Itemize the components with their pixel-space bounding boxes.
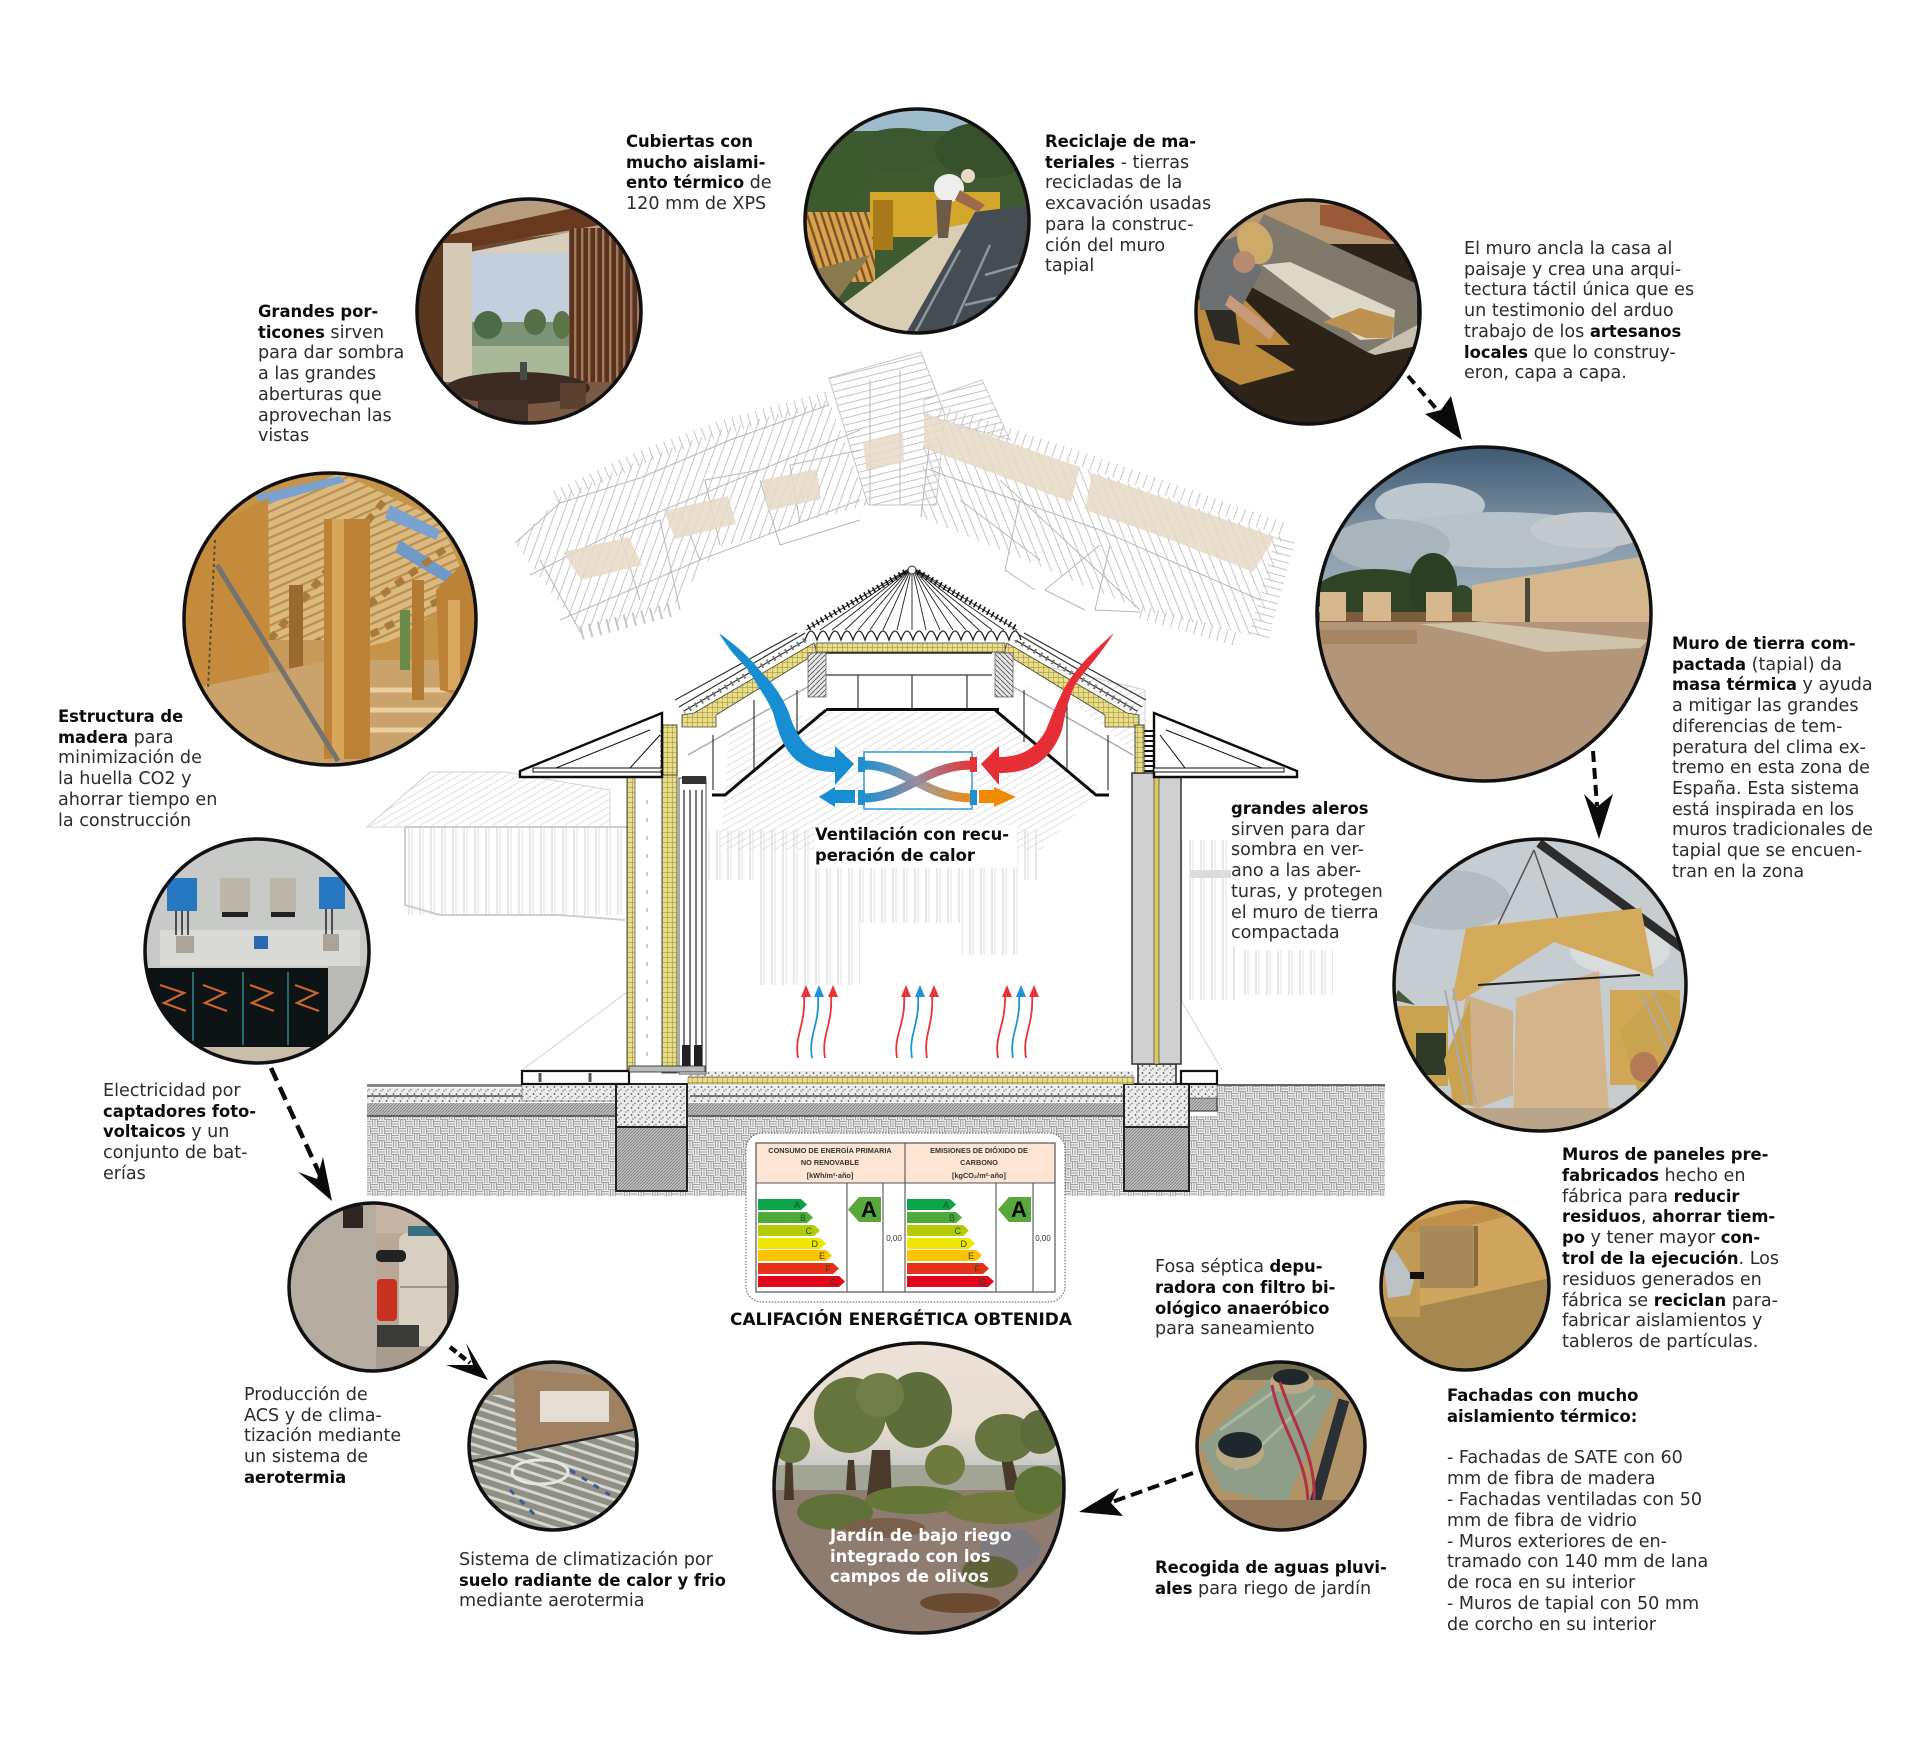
energy bars right: F — [974, 1264, 980, 1274]
text: cubiertas: mucho aislami- — [626, 153, 765, 172]
header right: CARBONO — [960, 1158, 998, 1167]
text: fachadas: tramado con 140 mm de lana — [1447, 1552, 1708, 1572]
text: fachadas: - Muros exteriores de en- — [1447, 1532, 1667, 1552]
text: fachadas: Fachadas con mucho — [1447, 1386, 1638, 1405]
values: 0,00 — [886, 1234, 902, 1243]
photo: roof insulation — [806, 110, 1028, 332]
text: produccion ACS: Producción de — [244, 1385, 368, 1405]
photo: aerothermal tank — [288, 1202, 459, 1372]
text: muro ancla — [1464, 239, 1694, 383]
text: reciclaje: para la construc- — [1045, 215, 1194, 235]
text: muros de paneles: trol de la ejecución. Los — [1562, 1249, 1779, 1269]
roof top insulation — [816, 643, 1005, 652]
rating A right — [998, 1197, 1031, 1222]
text: muros de paneles: tableros de partículas. — [1562, 1332, 1758, 1352]
ridge cone with fan lines — [805, 566, 1021, 640]
text: fachadas: de roca en su interior — [1447, 1573, 1635, 1593]
text: grandes aleros — [1231, 799, 1387, 946]
ghost background house — [367, 660, 1340, 1070]
energy bars right — [907, 1199, 994, 1287]
roof slope mirrored — [995, 633, 1146, 795]
text: muro ancla: trabajo de los artesanos — [1464, 322, 1681, 342]
energy bars left: F — [826, 1264, 832, 1274]
text: fosa septica: radora con filtro bi- — [1155, 1278, 1335, 1297]
ground layers — [367, 1084, 1385, 1196]
text: estructura: la construcción — [58, 811, 191, 831]
crossing ribbons — [864, 765, 972, 798]
text: muro ancla: locales que lo construy- — [1464, 343, 1676, 363]
text: sistema climatizacion — [459, 1550, 726, 1611]
photo: porticones window view — [417, 199, 641, 427]
building section drawing — [367, 566, 1385, 1196]
text: electricidad: Electricidad por — [103, 1081, 241, 1101]
text: muro de tierra — [1672, 634, 1873, 882]
text: grandes aleros: turas, y protegen — [1231, 882, 1383, 902]
text: porticones: para dar sombra — [258, 343, 404, 363]
text: produccion ACS — [244, 1385, 401, 1487]
text: electricidad: erías — [103, 1164, 146, 1184]
values: 0,00 — [1035, 1234, 1051, 1243]
text: fachadas: aislamiento térmico: — [1447, 1407, 1637, 1426]
text: muros de paneles: residuos, ahorrar tiem- — [1562, 1207, 1775, 1227]
blue intake arrow — [719, 633, 854, 785]
text: fachadas — [1447, 1386, 1708, 1635]
text: muro ancla: eron, capa a capa. — [1464, 363, 1627, 383]
energy bars left: B — [800, 1213, 806, 1223]
rating A left: A — [861, 1197, 877, 1222]
text: reciclaje: ción del muro — [1045, 236, 1165, 256]
text: sistema climatizacion: mediante aerotermia — [459, 1591, 645, 1611]
header left: NO RENOVABLE — [801, 1158, 859, 1167]
text: reciclaje — [1045, 132, 1211, 276]
photo: recycled earth bucket — [1195, 199, 1421, 425]
arrow: wall to panels — [1584, 751, 1613, 839]
header left: CONSUMO DE ENERGÍA PRIMARIA — [768, 1146, 892, 1155]
photo: timber structure — [184, 473, 476, 765]
photo: radiant floor — [468, 1361, 638, 1531]
right eave — [1135, 713, 1297, 777]
text: sistema climatizacion: Sistema de climatización por — [459, 1550, 713, 1570]
text: grandes aleros: sombra en ver- — [1231, 840, 1364, 860]
text: ventilacion: Ventilación con recu- — [815, 825, 1009, 844]
text: muro de tierra: está inspirada en los — [1672, 800, 1854, 820]
text: porticones: a las grandes — [258, 364, 376, 384]
text: fosa septica: para saneamiento — [1155, 1319, 1315, 1339]
text: produccion ACS: tización mediante — [244, 1426, 401, 1446]
text: recogida aguas — [1155, 1558, 1387, 1599]
text: grandes aleros: ano a las aber- — [1231, 861, 1361, 881]
text: porticones: aberturas que — [258, 385, 382, 405]
text: muro de tierra: tremo en esta zona de — [1672, 758, 1870, 778]
text: produccion ACS: ACS y de clima- — [244, 1406, 382, 1426]
text: jardin: Jardín de bajo riego — [830, 1526, 1011, 1545]
blue outlet arrow — [819, 787, 855, 807]
text: electricidad: voltaicos y un — [103, 1122, 229, 1142]
arrow: aerothermal to floor — [446, 1343, 488, 1380]
text: grandes aleros: compactada — [1231, 923, 1340, 943]
text: muro ancla: un testimonio del arduo — [1464, 301, 1674, 321]
text: porticones: vistas — [258, 426, 309, 446]
text: cubiertas: Cubiertas con — [626, 132, 753, 151]
circle outline wall — [1317, 447, 1651, 781]
circle outline olive — [774, 1343, 1064, 1633]
text: estructura: Estructura de — [58, 707, 183, 726]
roof slope and insulation — [675, 633, 826, 795]
energy bars right: G — [979, 1277, 986, 1287]
circle outline panel — [1381, 1202, 1549, 1370]
energy bars right: B — [949, 1213, 955, 1223]
circle outline solar — [145, 839, 369, 1063]
text: estructura: madera para — [58, 728, 173, 748]
left wall — [627, 743, 706, 1074]
circle outline porticones — [417, 199, 641, 423]
text: estructura — [58, 707, 217, 831]
floor slab — [522, 1064, 1217, 1084]
text: estructura: minimización de — [58, 748, 202, 768]
header right: [kgCO₂/m²·año] — [952, 1171, 1007, 1180]
circle outline tank — [1197, 1362, 1365, 1530]
text: muro ancla: El muro ancla la casa al — [1464, 239, 1672, 259]
orange outlet arrow — [979, 787, 1016, 807]
energy bars left: E — [819, 1251, 825, 1261]
text: ventilacion: peración de calor — [815, 846, 975, 865]
wireframe timber model — [515, 352, 1285, 640]
ceiling structure — [826, 653, 999, 711]
text: muros de paneles: fabricar aislamientos y — [1562, 1311, 1762, 1331]
photo: olive garden — [774, 1343, 1066, 1635]
text: muro ancla: paisaje y crea una arqui- — [1464, 260, 1681, 280]
text: muros de paneles: fábrica se reciclan para- — [1562, 1291, 1778, 1311]
text: electricidad: captadores foto- — [103, 1102, 256, 1121]
circle outline earth — [1196, 200, 1420, 424]
text: sistema climatizacion: suelo radiante de calor y frio — [459, 1571, 726, 1590]
text: produccion ACS: un sistema de — [244, 1447, 368, 1467]
text: recogida aguas: Recogida de aguas pluvi- — [1155, 1558, 1387, 1577]
text: fachadas: mm de fibra de vidrio — [1447, 1511, 1637, 1531]
energy title: CALIFACIÓN ENERGÉTICA OBTENIDA — [730, 1310, 1072, 1329]
arrow: earth to wall — [1408, 376, 1462, 440]
text: muro de tierra: Muro de tierra com- — [1672, 634, 1856, 653]
text: reciclaje: teriales - tierras — [1045, 153, 1189, 173]
text: fosa septica: ológico anaeróbico — [1155, 1299, 1329, 1318]
text: muro de tierra: España. Esta sistema — [1672, 779, 1859, 799]
rating A right: A — [1011, 1197, 1027, 1222]
text: muro de tierra: pactada (tapial) da — [1672, 655, 1842, 675]
warm and cool air arrows — [797, 985, 1039, 1058]
text: muro de tierra: peratura del clima ex- — [1672, 738, 1866, 758]
photo: rainwater tank — [1197, 1362, 1367, 1532]
text: muros de paneles: residuos generados en — [1562, 1270, 1762, 1290]
text: grandes aleros: sirven para dar — [1231, 820, 1365, 840]
energy rating card — [746, 1133, 1065, 1302]
ventilation heat recovery diagram — [719, 633, 1114, 809]
text: fachadas: de corcho en su interior — [1447, 1615, 1656, 1635]
heat exchanger box — [864, 752, 972, 809]
text: cubiertas: ento térmico de — [626, 173, 772, 193]
photo: prefabricated panel — [1380, 1201, 1550, 1372]
text: muro de tierra: masa térmica y ayuda — [1672, 675, 1873, 695]
energy bars right: A — [943, 1200, 949, 1210]
circle outline timber — [184, 473, 476, 765]
energy bars right: D — [960, 1239, 968, 1249]
text: recogida aguas: ales para riego de jardín — [1155, 1579, 1371, 1599]
text: fachadas: - Fachadas ventiladas con 50 — [1447, 1490, 1702, 1510]
text: cubiertas — [626, 132, 772, 214]
text: muros de paneles: po y tener mayor con- — [1562, 1228, 1760, 1248]
right wall — [1132, 773, 1181, 1064]
photo: crane lifting panel — [1390, 839, 1686, 1133]
beige earth wall panels — [563, 413, 1275, 580]
text: jardin: integrado con los — [830, 1547, 990, 1566]
text: porticones — [258, 302, 404, 446]
text: electricidad: conjunto de bat- — [103, 1143, 248, 1163]
text: fachadas: mm de fibra de madera — [1447, 1469, 1655, 1489]
energy bars left — [758, 1199, 845, 1287]
text: reciclaje: excavación usadas — [1045, 194, 1211, 214]
photo: solar inverters and batteries — [144, 839, 370, 1065]
circle outline roof — [805, 109, 1029, 333]
circle outline crane — [1394, 839, 1686, 1131]
text: muro de tierra: tran en la zona — [1672, 862, 1804, 882]
left eave — [520, 713, 677, 777]
text: muro ancla: tectura táctil única que es — [1464, 280, 1694, 300]
text: porticones: Grandes por- — [258, 302, 378, 321]
energy bars right: E — [968, 1251, 974, 1261]
text: muro de tierra: a mitigar las grandes — [1672, 696, 1858, 716]
text: estructura: ahorrar tiempo en — [58, 790, 217, 810]
energy bars right: C — [954, 1226, 962, 1236]
text: muro de tierra: muros tradicionales de — [1672, 820, 1873, 840]
text: porticones: ticones sirven — [258, 323, 384, 343]
footings — [616, 1084, 1189, 1191]
text: fosa septica — [1155, 1257, 1335, 1339]
text: jardin: campos de olivos — [830, 1567, 989, 1586]
energy bars left: D — [812, 1239, 818, 1249]
arrow: solar to aerothermal — [271, 1068, 332, 1201]
text: fosa septica: Fosa séptica depu- — [1155, 1257, 1322, 1277]
text: estructura: la huella CO2 y — [58, 769, 192, 789]
header left: [kWh/m²·año] — [807, 1171, 854, 1180]
text: grandes aleros: el muro de tierra — [1231, 903, 1379, 923]
red intake arrow — [981, 633, 1114, 785]
text: muros de paneles: fabricados hecho en — [1562, 1166, 1746, 1186]
duct caps — [858, 757, 977, 805]
circle outline floor — [469, 1362, 637, 1530]
text: grandes aleros: grandes aleros — [1231, 799, 1368, 818]
text: electricidad — [103, 1081, 256, 1184]
text: jardin — [829, 1526, 1011, 1586]
arrow: tank to garden — [1079, 1473, 1193, 1516]
text: reciclaje: Reciclaje de ma- — [1045, 132, 1196, 151]
text: cubiertas: 120 mm de XPS — [626, 194, 766, 214]
photo: rammed earth wall site — [1313, 447, 1652, 782]
circle outline aerothermal — [289, 1203, 457, 1371]
text: fachadas: - Fachadas de SATE con 60 — [1447, 1448, 1683, 1468]
energy bars left: C — [806, 1226, 812, 1236]
text: produccion ACS: aerotermia — [244, 1468, 346, 1487]
text: ventilacion — [815, 825, 1017, 868]
text: reciclaje: recicladas de la — [1045, 173, 1182, 193]
text: muros de paneles: fábrica para reducir — [1562, 1187, 1740, 1207]
text: muro de tierra: diferencias de tem- — [1672, 717, 1842, 737]
text: muro de tierra: tapial que se encuen- — [1672, 841, 1862, 861]
text: muros de paneles: Muros de paneles pre- — [1562, 1145, 1768, 1164]
text: muros de paneles — [1562, 1145, 1779, 1352]
header right: EMISIONES DE DIÓXIDO DE — [930, 1146, 1028, 1155]
rating A left — [848, 1197, 881, 1222]
text: reciclaje: tapial — [1045, 256, 1094, 276]
energy bars left: A — [794, 1200, 800, 1210]
energy bars left: G — [830, 1277, 837, 1287]
text: porticones: aprovechan las — [258, 406, 392, 426]
text: fachadas: - Muros de tapial con 50 mm — [1447, 1594, 1699, 1614]
